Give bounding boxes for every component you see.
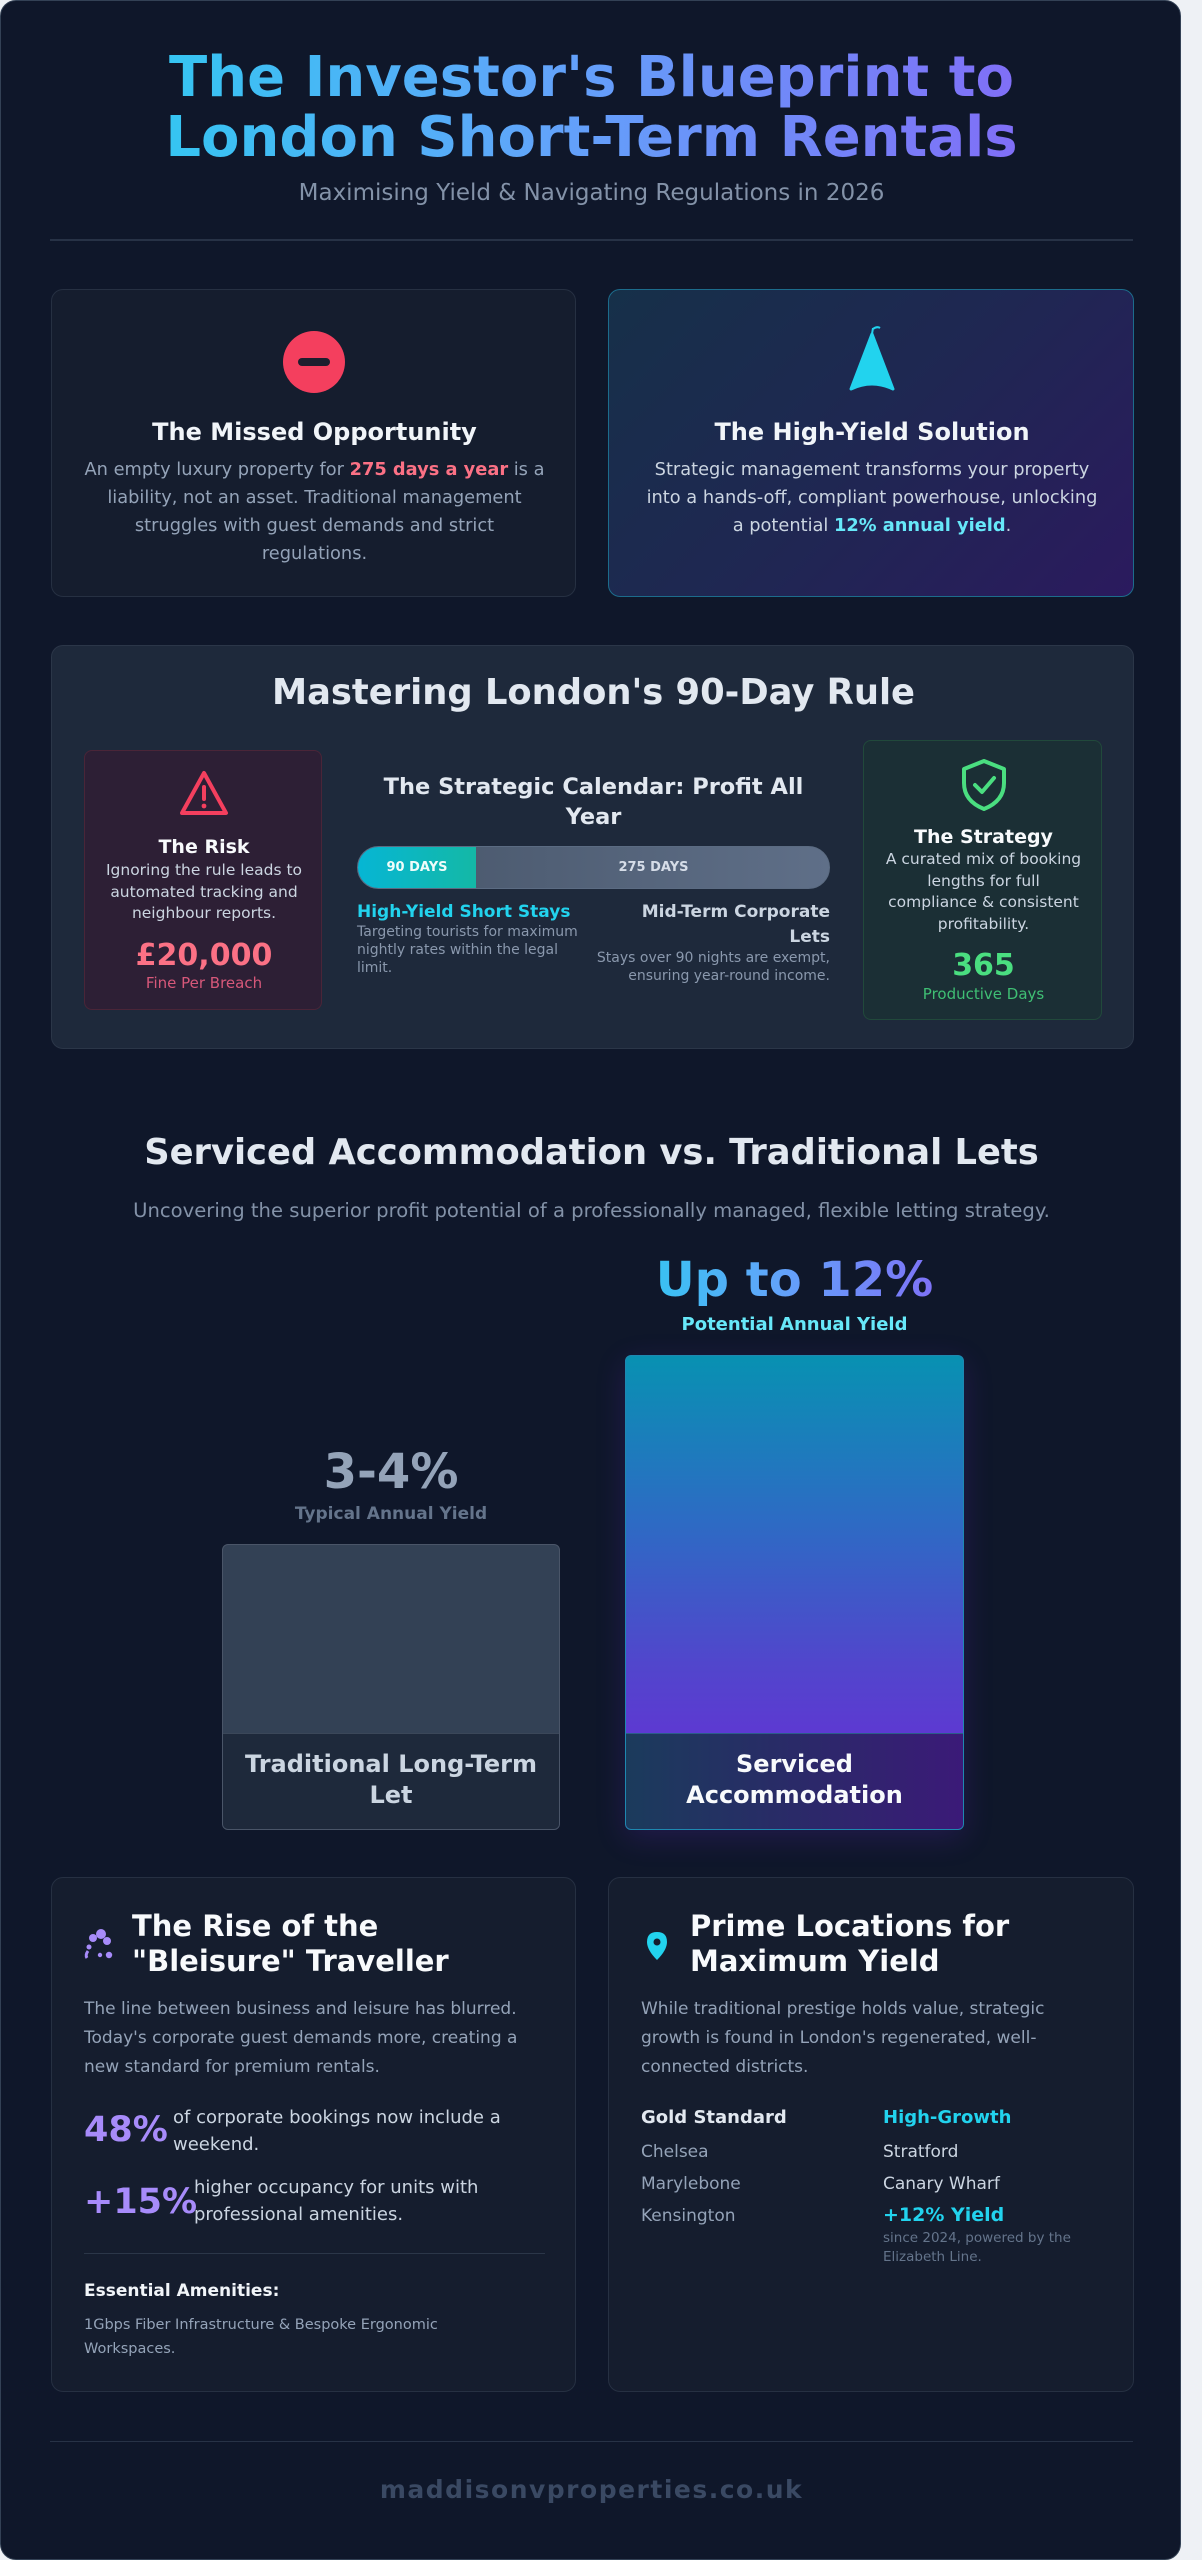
body: While traditional prestige holds value, strategic growth is found in London's regenerated, well-connected districts.	[641, 1999, 1044, 2077]
panel: 90-day rule	[51, 645, 1134, 1049]
strategy text: compliance & consistent	[888, 893, 1079, 911]
stat: +15%: higher occupancy for units with professional amenities.	[194, 2177, 478, 2225]
icon: shield	[962, 759, 1006, 811]
amenities: Workspaces.	[84, 2341, 175, 2357]
progress bar	[357, 846, 830, 889]
column: gold standard: Chelsea	[641, 2142, 709, 2162]
bar chart: serviced accommodation: Potential Annual Yield	[682, 1314, 907, 1335]
subtitle: Maximising Yield & Navigating Regulations in 2026	[299, 180, 884, 206]
amenities: Essential Amenities:	[84, 2281, 279, 2301]
calendar title: The Strategic Calendar: Profit All	[384, 774, 803, 800]
column: gold standard: Kensington	[641, 2206, 736, 2226]
stat: up to 12%	[585, 1252, 1004, 1308]
heading: The Rise of the	[132, 1909, 378, 1943]
icon: stop sign	[283, 331, 345, 393]
stat: up to 12%: Up to 12%	[656, 1252, 933, 1308]
section subtitle: Uncovering the superior profit potential of a professionally managed, flexible letting strategy.	[133, 1199, 1050, 1222]
heading	[690, 1909, 1010, 1978]
fine stat: £20,000	[136, 938, 272, 973]
panel: missed opportunity	[51, 289, 576, 597]
risk box	[84, 750, 322, 1010]
panel: bleisure traveller	[51, 1877, 576, 2392]
amenities	[84, 2281, 438, 2357]
risk title: The Risk	[158, 836, 250, 858]
icon: rocket arrow	[850, 326, 894, 390]
body: The line between business and leisure has blurred. Today's corporate guest demands more, creating a new standard for premium rentals.	[84, 1999, 517, 2077]
heading: The Missed Opportunity	[152, 418, 477, 446]
title: London Short-Term Rentals	[165, 105, 1018, 170]
column: high-growth	[883, 2107, 1071, 2265]
bar: Accommodation	[686, 1781, 903, 1809]
risk text: Ignoring the rule leads to automated tracking and neighbour reports.	[106, 861, 302, 922]
bar chart: traditional: Typical Annual Yield	[295, 1504, 487, 1524]
section heading: comparison: Serviced Accommodation vs. Traditional Lets	[144, 1132, 1039, 1173]
strategy text: lengths for full	[927, 872, 1040, 890]
column: high-growth: since 2024, powered by the	[883, 2230, 1071, 2246]
icon: warning	[180, 770, 228, 815]
panel: prime locations	[608, 1877, 1134, 2392]
bar	[625, 1355, 964, 1830]
column: gold standard: Gold Standard	[641, 2107, 787, 2128]
calendar title: Year	[566, 804, 621, 830]
short stays label: High-Yield Short Stays	[357, 902, 570, 922]
column: gold standard: Marylebone	[641, 2174, 741, 2194]
calendar title	[384, 774, 803, 830]
heading: Prime Locations for	[690, 1909, 1009, 1943]
heading: Mastering London's 90-Day Rule	[272, 672, 915, 713]
stat: 48%: 48%	[84, 2110, 168, 2150]
mid-term label: ensuring year-round income.	[628, 968, 830, 984]
productive days stat: 365	[952, 948, 1015, 983]
heading	[132, 1909, 449, 1978]
heading: "Bleisure" Traveller	[132, 1944, 449, 1978]
body text: Strategic management transforms your property into a hands-off, compliant powerhouse, unlocking a potential 12% annual yield.	[647, 459, 1097, 536]
calendar	[356, 774, 830, 984]
column: high-growth: Stratford	[883, 2142, 958, 2162]
progress bar: 90 DAYS	[386, 860, 448, 875]
heading: Maximum Yield	[690, 1944, 940, 1978]
heading: The High-Yield Solution	[714, 418, 1030, 446]
strategy text	[886, 850, 1081, 933]
bar chart: traditional	[222, 1444, 560, 1830]
icon: map pin	[647, 1932, 667, 1960]
title	[1, 48, 1182, 168]
progress bar: 275 DAYS	[618, 860, 689, 875]
mid-term label: Lets	[789, 927, 830, 947]
stat: +15%: +15%	[84, 2182, 197, 2222]
column: high-growth: Canary Wharf	[883, 2174, 1000, 2194]
column: high-growth: Elizabeth Line.	[883, 2249, 982, 2265]
strategy box: Productive Days	[923, 985, 1044, 1003]
mid-term label: Stays over 90 nights are exempt,	[597, 950, 830, 966]
short stays label: Targeting tourists for maximum nightly rates within the legal limit.	[357, 924, 578, 976]
bar: Serviced	[736, 1750, 853, 1778]
bar chart: serviced accommodation	[616, 1252, 973, 1847]
column: high-growth: +12% Yield	[883, 2204, 1004, 2226]
strategy text: A curated mix of booking	[886, 850, 1081, 868]
bar	[222, 1544, 560, 1830]
amenities: 1Gbps Fiber Infrastructure & Bespoke Ergonomic	[84, 2317, 438, 2333]
mid-term label	[597, 902, 830, 984]
title: The Investor's Blueprint to	[169, 45, 1014, 110]
column: high-growth: High-Growth	[883, 2107, 1011, 2128]
bar: Traditional Long-Term	[245, 1750, 537, 1778]
risk box: Fine Per Breach	[146, 974, 262, 992]
strategy box	[863, 740, 1102, 1020]
panel: high-yield solution	[608, 289, 1134, 597]
strategy text: profitability.	[938, 915, 1029, 933]
body text: An empty luxury property for 275 days a year is a liability, not an asset. Traditional management struggles with guest demands and strict regulations.	[84, 459, 544, 564]
stat: 48%: of corporate bookings now include a weekend.	[173, 2107, 501, 2155]
bar: Let	[369, 1781, 413, 1809]
strategy title: The Strategy	[914, 826, 1053, 848]
mid-term label: Mid-Term Corporate	[642, 902, 830, 922]
icon: dots	[84, 1929, 112, 1959]
column: gold standard	[641, 2107, 787, 2226]
footer: maddisonvproperties.co.uk	[380, 2475, 803, 2504]
stat: 3-4%: 3-4%	[324, 1444, 458, 1500]
